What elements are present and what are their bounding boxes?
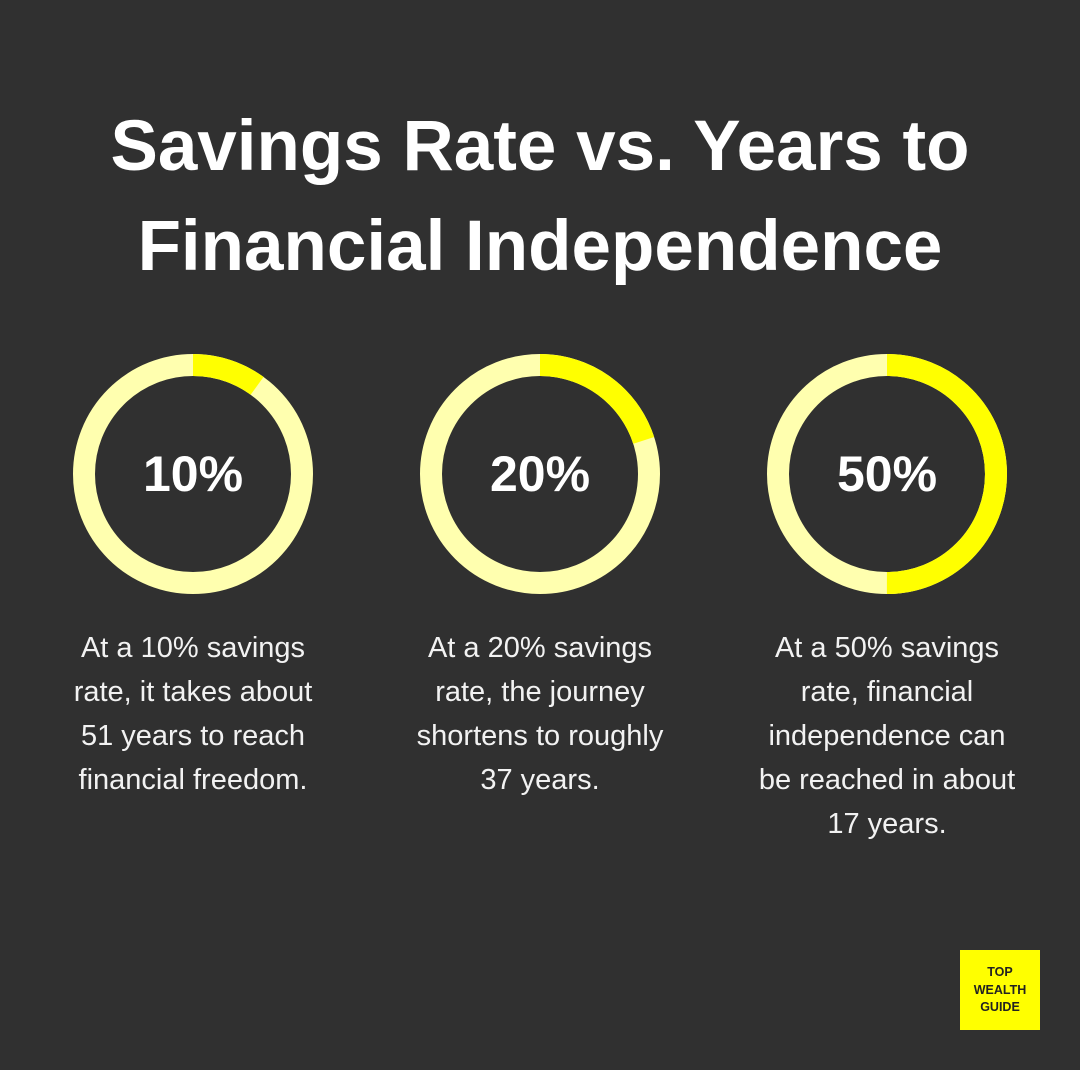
donut: 50%: 50% [837, 446, 937, 502]
logo: GUIDE [980, 1000, 1020, 1014]
text: 10% description: financial freedom. [79, 764, 307, 796]
text: 50% description: be reached in about [759, 764, 1015, 796]
title: Savings Rate vs. Years to [110, 107, 970, 186]
text: 20% description: rate, the journey [435, 676, 645, 708]
text: 10% description: rate, it takes about [74, 676, 312, 708]
text: 10% description: 51 years to reach [81, 720, 305, 752]
donut: 10%: 10% [143, 446, 243, 502]
text: 20% description: 37 years. [480, 764, 600, 796]
logo: TOP [987, 965, 1013, 979]
donut: 20%: 20% [490, 446, 590, 502]
logo: WEALTH [974, 982, 1026, 996]
text: 20% description: shortens to roughly [417, 720, 663, 752]
text: 50% description: rate, financial [801, 676, 973, 708]
donut: 20% [431, 365, 649, 583]
title: Financial Independence [138, 207, 942, 286]
text: 20% description: At a 20% savings [428, 632, 652, 664]
text: 50% description: 17 years. [827, 808, 947, 840]
title [110, 107, 970, 286]
text: 20% description [417, 632, 664, 796]
donut: 50% [778, 365, 996, 583]
text: 10% description: At a 10% savings [81, 632, 305, 664]
text: 50% description: At a 50% savings [775, 632, 999, 664]
text: 50% description: independence can [768, 720, 1006, 752]
logo [960, 950, 1040, 1030]
donut: 10% [84, 365, 302, 583]
text: 50% description [759, 632, 1015, 840]
text: 10% description [74, 632, 312, 796]
